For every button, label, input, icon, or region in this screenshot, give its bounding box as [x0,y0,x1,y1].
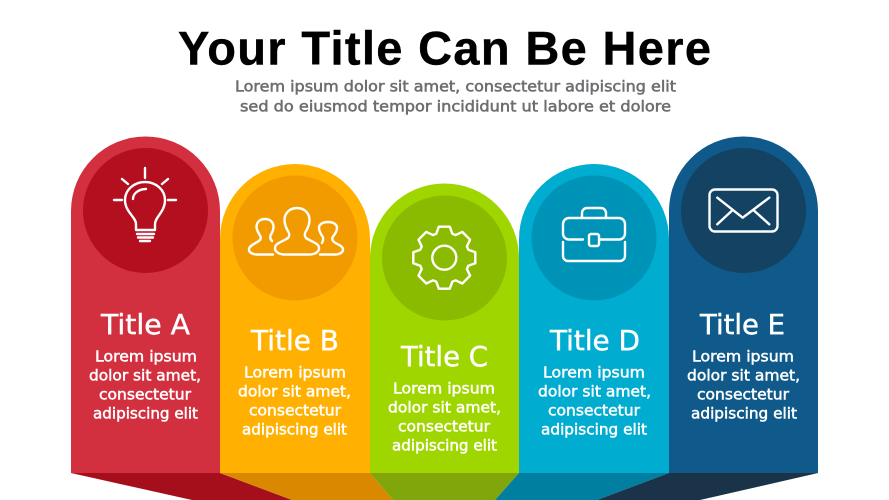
text: body E: Lorem ipsum [692,348,794,366]
text: body A [89,348,201,422]
heading: Title A: Title A [100,308,190,341]
text: body B: dolor sit amet, [238,382,351,400]
text: body D: Lorem ipsum [543,364,645,382]
icon: envelope [710,190,778,232]
text: body B [238,364,351,438]
text: body A: adipiscing elit [93,404,198,422]
text: body E: consectetur [697,386,790,404]
text: body B: consectetur [249,402,342,420]
text: body C: adipiscing elit [392,436,497,454]
panel: Title E [669,136,818,473]
subtitle: Lorem ipsum dolor sit amet, consectetur adipiscing elit [235,78,676,96]
text: body A: Lorem ipsum [95,348,197,366]
heading: Title E: Title E [699,308,785,341]
panel: Title D [519,164,669,473]
text: body C: consectetur [398,418,491,436]
text: body D [538,364,651,438]
text: body E: adipiscing elit [691,404,797,422]
text: body E: dolor sit amet, [687,366,800,384]
text: body E [687,348,800,422]
heading: Title D: Title D [549,324,640,357]
heading: Title B: Title B [250,324,339,357]
panel: Title A [71,136,220,473]
panel: Title B [220,164,370,473]
text: body B: adipiscing elit [242,420,347,438]
subtitle [235,78,676,116]
icon: light bulb [114,168,176,241]
heading: Title C: Title C [400,340,488,373]
floor shadows [71,473,818,500]
title: Your Title Can Be Here [178,22,711,74]
text: body D: adipiscing elit [541,420,647,438]
text: body C: dolor sit amet, [388,398,501,416]
text: body C: Lorem ipsum [393,380,495,398]
icon: people [249,208,343,254]
text: body D: dolor sit amet, [538,382,651,400]
text: body B: Lorem ipsum [244,364,346,382]
text: body D: consectetur [548,402,641,420]
text: body C [388,380,501,454]
text: body A: dolor sit amet, [89,366,201,384]
subtitle: sed do eiusmod tempor incididunt ut labore et dolore [240,98,671,116]
text: body A: consectetur [99,386,192,404]
icon: gear [413,227,475,289]
panel: Title C [370,184,519,473]
icon: briefcase [563,208,625,261]
